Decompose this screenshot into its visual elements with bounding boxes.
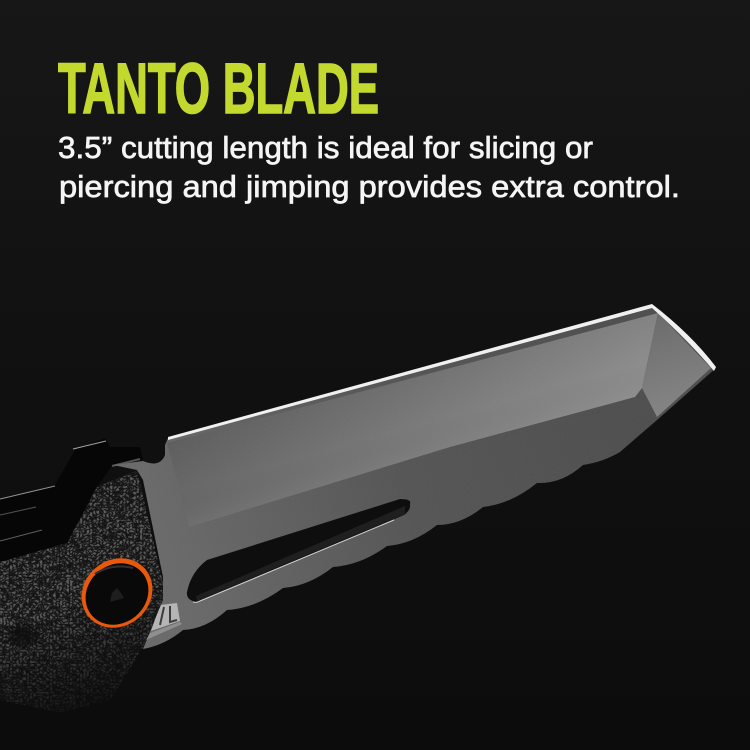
description text: 3.5” cutting length is ideal for slicing or bbox=[58, 130, 593, 165]
cutout slot bbox=[187, 499, 410, 602]
tip facet bbox=[642, 313, 711, 417]
blade body and lower bevel bbox=[113, 305, 716, 649]
blade grain bbox=[130, 300, 730, 660]
textured handle bbox=[0, 470, 163, 712]
knife bbox=[0, 300, 730, 720]
description text bbox=[58, 130, 680, 204]
sharpened spine edge bbox=[168, 304, 716, 440]
description text: piercing and jimping provides extra control. bbox=[59, 169, 680, 204]
maker's mark bbox=[151, 603, 180, 631]
title: TANTO BLADE bbox=[58, 50, 379, 129]
orange pivot ring with screw bbox=[67, 544, 167, 642]
main ground flat bbox=[167, 313, 658, 527]
blade bbox=[113, 300, 730, 660]
screw head recess bbox=[110, 588, 124, 602]
black liner and frame behind handle bbox=[0, 438, 143, 562]
